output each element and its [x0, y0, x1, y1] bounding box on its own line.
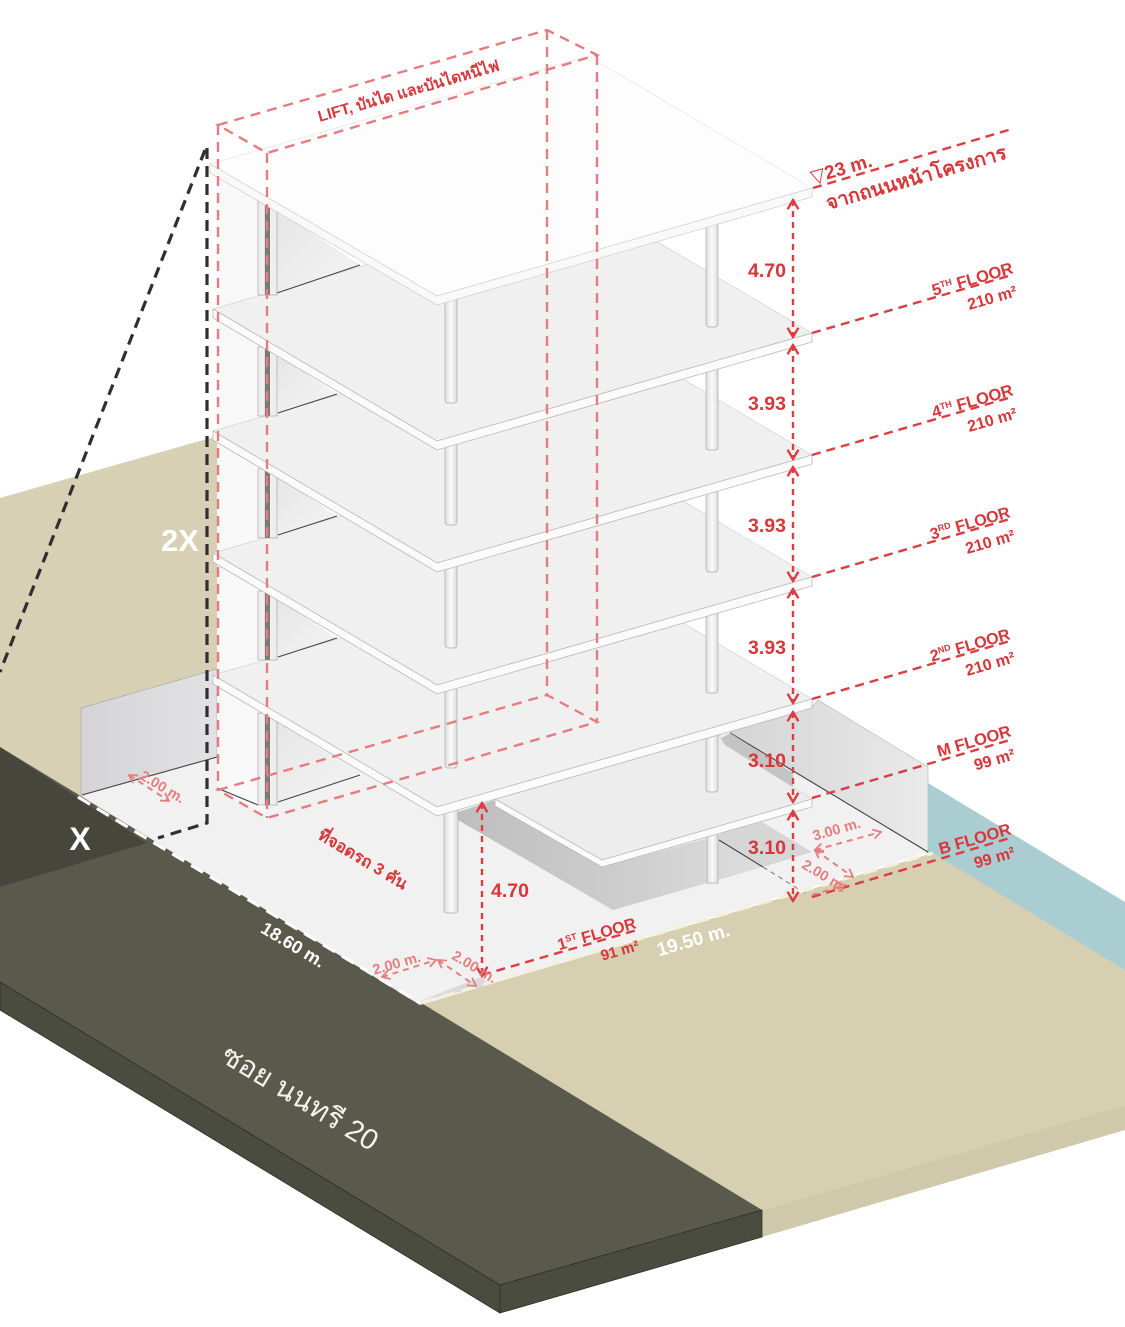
slab: 3rd floor [213, 445, 812, 694]
name: FLOOR [950, 382, 1015, 416]
name: ST [564, 931, 578, 944]
name: FLOOR [949, 504, 1013, 538]
slab edge [213, 431, 812, 572]
wall behind left [277, 210, 360, 293]
mezzanine top [495, 733, 812, 860]
basement back area [720, 822, 812, 867]
slab: 2nd floor [213, 567, 812, 816]
setback rear arrow 3.00 [815, 832, 881, 850]
arrow 3.93 upper [792, 345, 794, 459]
name: TH [939, 277, 953, 290]
setback front text b: 2.00 m. [449, 948, 499, 987]
floor line [278, 775, 360, 802]
road surface [0, 747, 762, 1285]
wall behind left [277, 476, 337, 535]
setback rear text 3.00: 3.00 m. [811, 816, 863, 845]
arrow 3.93 middle [792, 467, 794, 581]
column front [445, 560, 457, 648]
name: 5 [930, 280, 944, 300]
road right side [500, 1210, 762, 1313]
name: M FLOOR [935, 723, 1013, 761]
pit below mezzanine [458, 800, 763, 910]
strip behind mezzanine [718, 733, 793, 787]
slab top [213, 323, 812, 563]
mezzanine slab [495, 733, 812, 867]
column front [445, 680, 457, 768]
roof edge [210, 164, 812, 305]
black dashed 2X height line [0, 148, 207, 838]
label: road name: ซอย นนทรี 20 [216, 1039, 384, 1158]
small setback dimensions [129, 768, 881, 987]
3.10: 3.10 [748, 837, 786, 859]
columns above 5th floor [258, 202, 718, 403]
name: TH [939, 399, 953, 412]
height limit leader [813, 129, 1012, 188]
tan land front right [420, 853, 1125, 1210]
area: 210 m² [966, 406, 1019, 436]
columns above 3rd floor [258, 460, 718, 648]
label: 23 m: ▽23 m. [808, 151, 875, 189]
box bottom [218, 695, 597, 818]
column right [706, 580, 718, 693]
setback front text a: 2.00 m. [371, 950, 423, 979]
label: 18.60 m.: 18.60 m. [257, 918, 329, 972]
column front [445, 295, 457, 403]
mezzanine edge [495, 799, 812, 867]
columns above 2nd floor [258, 580, 718, 768]
column left [258, 713, 277, 805]
setback front arrow a [382, 960, 436, 977]
arrow 3.93 lower [792, 589, 794, 703]
column right [706, 700, 718, 792]
wall base line left [82, 757, 217, 795]
name: RD [937, 520, 952, 533]
area: 210 m² [964, 528, 1017, 558]
slab top [213, 567, 812, 807]
column right [706, 340, 718, 450]
slab: 4th floor [213, 323, 812, 572]
basement column [707, 830, 718, 883]
wall behind left [277, 720, 360, 802]
core base line [217, 788, 258, 805]
columns above 4th floor [258, 340, 718, 525]
name: FLOOR [575, 915, 639, 949]
column left [258, 202, 277, 295]
road boundary dashed line [78, 797, 420, 1003]
boundary wall left [81, 669, 217, 795]
area: 99 m² [972, 747, 1017, 774]
column front [444, 800, 458, 913]
vertical dimension arrows [482, 200, 793, 976]
label: 2nd floor [928, 625, 1017, 680]
ground 4.70: 4.70 [491, 880, 529, 902]
wall base line right [730, 733, 928, 852]
name: FLOOR [950, 260, 1015, 294]
label: 3rd floor [928, 503, 1017, 558]
ground level columns [258, 700, 718, 913]
name: 1 [556, 935, 569, 954]
name: 3 [928, 525, 942, 544]
4.70: 4.70 [748, 260, 786, 282]
label: parking: ที่จอดรถ 3 คัน [315, 823, 413, 894]
area: 91 m² [599, 938, 641, 965]
label: M floor [935, 723, 1017, 774]
basement dashed hidden line [763, 867, 808, 895]
area: 99 m² [972, 845, 1017, 872]
box verticals [218, 30, 597, 818]
3.10: 3.10 [748, 750, 786, 772]
label: from road: จากถนนหน้าโครงการ [823, 141, 1010, 215]
slab top [213, 445, 812, 685]
box top [218, 30, 597, 153]
3.93: 3.93 [748, 637, 786, 659]
slab edge [213, 675, 812, 816]
setback rear text 2.00: 2.00 m. [799, 857, 849, 896]
site floor slab [80, 733, 928, 1005]
arrow 3.10 lower [792, 811, 794, 901]
tan land edge [762, 1105, 1125, 1237]
name: FLOOR [949, 626, 1013, 660]
tan land back left [0, 436, 217, 800]
wall behind left [277, 354, 337, 413]
floor line [278, 638, 337, 657]
setback left arrow [129, 775, 169, 801]
arrow ground 4.70 [481, 803, 483, 976]
label: lift and stairs: LIFT, บันได และบันไดหนีไฟ [316, 56, 501, 126]
arrow 3.10 upper [792, 712, 794, 802]
area: 210 m² [964, 650, 1017, 680]
column left [258, 469, 277, 538]
name: 4 [930, 402, 944, 422]
arrow 4.70 [792, 200, 794, 337]
setback left text: 2.00 m. [137, 768, 187, 807]
road shadow [0, 747, 147, 887]
3.93: 3.93 [748, 393, 786, 415]
slab: 5th floor [213, 201, 812, 450]
column right [706, 215, 718, 327]
roof top [210, 56, 812, 296]
canal [925, 783, 1125, 972]
lift and stair volume, dashed box [218, 30, 597, 818]
area: 210 m² [966, 284, 1019, 314]
column right [706, 460, 718, 572]
column left [258, 347, 277, 416]
slab top [213, 201, 812, 441]
slab edge [213, 553, 812, 694]
setback rear arrow 2.00 [815, 850, 853, 877]
basement edge lines [719, 840, 763, 867]
floor line [278, 394, 337, 413]
name: 2 [928, 647, 942, 666]
slab edge [213, 309, 812, 450]
setback front arrow b [438, 960, 476, 986]
label: 19.50 m.: 19.50 m. [655, 920, 732, 961]
label: 5th floor [930, 260, 1019, 314]
slab: roof [210, 56, 812, 305]
3.93: 3.93 [748, 515, 786, 537]
label: 4th floor [930, 382, 1019, 436]
floor line [278, 516, 337, 535]
label: B floor [937, 821, 1017, 872]
column front [445, 440, 457, 525]
wall behind left [277, 598, 337, 657]
side boundary dashed line [420, 853, 933, 1003]
floor leaders [482, 275, 1012, 975]
label: 1st floor [555, 914, 641, 965]
setback rear arrow lower [812, 885, 845, 895]
height numbers [491, 260, 786, 902]
ground: site context [0, 436, 1125, 1313]
ramp [420, 977, 490, 1001]
label: 2X: 2X [161, 523, 199, 558]
building core side face [217, 170, 265, 815]
floor line [277, 265, 360, 293]
boundary wall right [728, 700, 928, 852]
name: B FLOOR [937, 821, 1013, 858]
road front side [0, 982, 500, 1313]
label: X: X [69, 821, 91, 857]
column left [258, 591, 277, 660]
name: ND [937, 642, 952, 655]
